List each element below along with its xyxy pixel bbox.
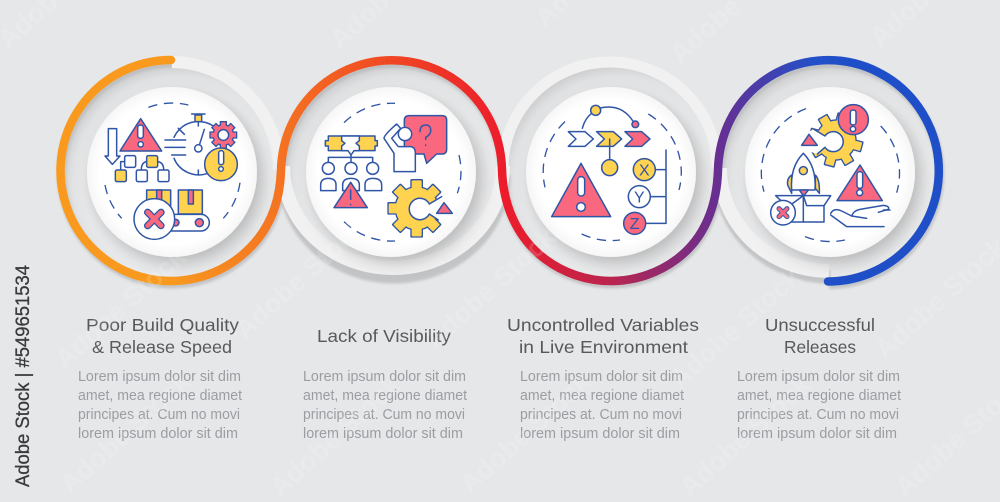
column 4 text bbox=[737, 315, 901, 442]
heading: lack of visibility: Lack of Visibility bbox=[317, 326, 451, 346]
body text column 1: amet, mea regione diamet bbox=[78, 388, 242, 404]
watermark: Adobe Stock bbox=[49, 241, 192, 374]
inner recessed discs bbox=[65, 65, 935, 277]
watermark: Adobe Stock bbox=[229, 211, 372, 344]
stock id vertical label: Adobe Stock | #549651534 bbox=[13, 265, 34, 487]
watermark: Adobe Stock bbox=[264, 369, 407, 502]
body text column 4: principes at. Cum no movi bbox=[737, 407, 899, 423]
icon: lack of visibility bbox=[321, 103, 461, 241]
loop shadows bbox=[62, 63, 940, 284]
body text column 3: lorem ipsum dolor sit dim bbox=[520, 426, 680, 442]
column 3 text bbox=[507, 315, 699, 442]
gradient ribbon bbox=[61, 60, 939, 282]
watermark: Adobe Stock bbox=[664, 261, 807, 394]
body text column 4 bbox=[737, 369, 901, 442]
body text column 1: Lorem ipsum dolor sit dim bbox=[78, 369, 241, 385]
heading: uncontrolled variables: Uncontrolled Variables bbox=[507, 315, 699, 335]
watermark: Adobe Stock bbox=[419, 221, 562, 354]
icon: build quality and release speed bbox=[105, 103, 240, 239]
body text column 3 bbox=[520, 369, 684, 442]
icon: uncontrolled variables bbox=[543, 105, 681, 241]
body text column 1 bbox=[78, 369, 242, 442]
icon: uncontrolled variables: Z bbox=[630, 216, 640, 233]
body text column 2: Lorem ipsum dolor sit dim bbox=[303, 369, 466, 385]
ghost ring segments bbox=[172, 62, 829, 271]
watermark: Adobe Stock bbox=[454, 366, 597, 499]
white discs bbox=[87, 87, 915, 257]
body text column 2: principes at. Cum no movi bbox=[303, 407, 465, 423]
heading: unsuccessful releases: Unsuccessful bbox=[765, 315, 875, 335]
body text column 4: lorem ipsum dolor sit dim bbox=[737, 426, 897, 442]
watermark: Adobe Stock bbox=[54, 366, 197, 499]
watermark: Adobe Stock bbox=[674, 369, 817, 502]
body text column 1: lorem ipsum dolor sit dim bbox=[78, 426, 238, 442]
body text column 3: amet, mea regione diamet bbox=[520, 388, 684, 404]
icon: uncontrolled variables: X bbox=[639, 162, 650, 179]
body text column 2 bbox=[303, 369, 467, 442]
body text column 3: Lorem ipsum dolor sit dim bbox=[520, 369, 683, 385]
icon: unsuccessful releases bbox=[761, 105, 900, 242]
heading: poor build quality: & Release Speed bbox=[92, 337, 232, 357]
heading: poor build quality: Poor Build Quality bbox=[86, 315, 239, 335]
heading: poor build quality bbox=[86, 315, 239, 357]
heading: uncontrolled variables bbox=[507, 315, 699, 357]
icon: uncontrolled variables: Y bbox=[634, 189, 645, 206]
column 2 text bbox=[303, 326, 467, 442]
column 1 text bbox=[78, 315, 242, 442]
body text column 2: lorem ipsum dolor sit dim bbox=[303, 426, 463, 442]
body text column 4: Lorem ipsum dolor sit dim bbox=[737, 369, 900, 385]
body text column 1: principes at. Cum no movi bbox=[78, 407, 240, 423]
body text column 4: amet, mea regione diamet bbox=[737, 388, 901, 404]
heading: unsuccessful releases bbox=[765, 315, 875, 357]
heading: uncontrolled variables: in Live Environment bbox=[519, 337, 688, 357]
heading: unsuccessful releases: Releases bbox=[784, 337, 856, 357]
body text column 3: principes at. Cum no movi bbox=[520, 407, 682, 423]
body text column 2: amet, mea regione diamet bbox=[303, 388, 467, 404]
